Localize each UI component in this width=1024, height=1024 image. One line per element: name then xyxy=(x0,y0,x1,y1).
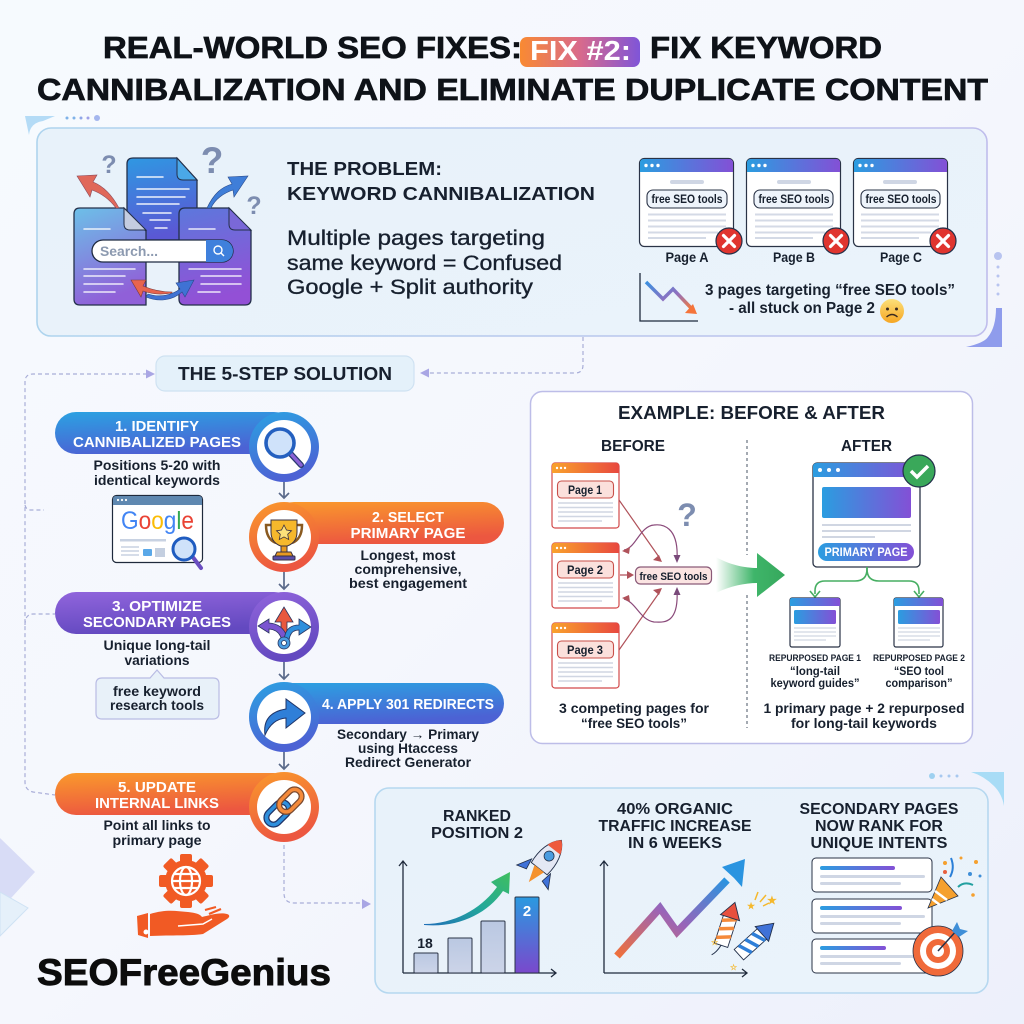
result 2: 40 percent traffic increase: 40% ORGANIC xyxy=(617,801,733,818)
panel: example before and after xyxy=(530,392,972,744)
callout: free keyword research tools: free keyword xyxy=(113,684,201,699)
step 2: select primary page: 2. SELECT xyxy=(372,509,444,526)
browser: page A: Page A xyxy=(666,250,709,265)
arrow: step 3 to 4 xyxy=(279,662,289,679)
step 3: optimize secondary pages: variations xyxy=(124,653,190,668)
icon: party popper xyxy=(928,856,982,908)
browser: page 2 xyxy=(552,543,619,608)
text: stuck on page 2 xyxy=(705,282,955,317)
connector: primary to repurposed pages xyxy=(810,567,924,597)
icon: sad face xyxy=(880,299,904,323)
heading: the problem: KEYWORD CANNIBALIZATION xyxy=(287,184,595,204)
step 1: identify cannibalized pages: identical keywords xyxy=(94,473,220,488)
step 2: select primary page xyxy=(249,502,504,591)
browser: page 2: Page 2 xyxy=(567,565,603,577)
keyword node: free SEO tools: free SEO tools xyxy=(640,571,708,583)
heading: the problem xyxy=(287,159,595,204)
result 3: secondary pages rank: NOW RANK FOR xyxy=(815,818,943,835)
result 3: secondary pages rank xyxy=(800,801,982,976)
result 1: ranked position 2: RANKED xyxy=(443,808,511,825)
logo: SEOFreeGenius xyxy=(37,854,331,993)
caption: before summary: “free SEO tools” xyxy=(581,715,687,731)
text: problem description: same keyword = Confused xyxy=(287,252,562,275)
chart: falling ranking xyxy=(640,273,698,321)
caption: repurposed page 1: “long-tail xyxy=(790,666,840,678)
arrow: before to after xyxy=(716,553,785,597)
fix number badge: FIX #2: xyxy=(530,35,631,66)
title: CANNIBALIZATION AND ELIMINATE DUPLICATE CONTENT xyxy=(37,72,988,107)
keyword node: free SEO tools xyxy=(636,567,712,584)
step 5: update internal links xyxy=(55,772,319,848)
text: stuck on page 2: 3 pages targeting “free SEO tools” xyxy=(705,282,955,299)
caption: repurposed page 1: keyword guides” xyxy=(770,678,860,690)
callout: free keyword research tools: research tools xyxy=(110,698,204,713)
step 3: optimize secondary pages xyxy=(55,592,319,668)
primary page label: PRIMARY PAGE xyxy=(824,545,908,559)
step 1: identify cannibalized pages: CANNIBALIZED PAGES xyxy=(73,434,241,451)
icon: firework rockets: ★ xyxy=(747,901,756,911)
arrows: pages competing for keyword xyxy=(619,500,680,650)
result 3: secondary pages rank: UNIQUE INTENTS xyxy=(810,835,948,852)
caption: after summary: for long-tail keywords xyxy=(791,715,937,731)
caption: after summary xyxy=(764,700,964,731)
step 4: apply 301 redirects: Secondary → Primary xyxy=(337,727,479,742)
text: problem description: Google + Split authority xyxy=(287,276,534,299)
text: problem description: Multiple pages targeting xyxy=(287,227,545,250)
bar chart: ranking climb: 18 xyxy=(417,935,433,951)
icon: green check xyxy=(903,455,935,487)
arrow: step 4 to 5 xyxy=(279,752,289,769)
heading: the problem: THE PROBLEM: xyxy=(287,159,442,179)
step 5: update internal links: 5. UPDATE xyxy=(118,779,196,796)
icon: firework rockets: ☆ xyxy=(730,963,738,972)
search result cards xyxy=(812,858,932,973)
icon: rocket xyxy=(513,828,577,894)
step 2: select primary page: comprehensive, xyxy=(354,562,462,577)
arrow: step 1 to 2 xyxy=(279,482,289,498)
browser: primary page xyxy=(813,455,935,567)
caption: repurposed page 1 xyxy=(769,653,862,690)
step 4: apply 301 redirects: 4. APPLY 301 REDIRECTS xyxy=(322,696,494,713)
icon: chain link xyxy=(263,786,305,828)
title: FIX KEYWORD xyxy=(650,30,882,65)
icon: google search window xyxy=(112,496,202,568)
text: stuck on page 2: - all stuck on Page 2 xyxy=(729,300,875,317)
title: REAL-WORLD SEO FIXES: xyxy=(103,30,522,65)
browser: page B xyxy=(746,158,849,265)
arrowheads on connectors xyxy=(146,368,429,909)
search bar: Search... xyxy=(100,243,158,259)
title xyxy=(37,30,988,107)
browser: repurposed page 2 xyxy=(894,598,943,647)
step 5: update internal links: primary page xyxy=(112,833,202,848)
browser: page 3: Page 3 xyxy=(567,645,603,657)
text: problem description xyxy=(287,227,562,299)
result 3: secondary pages rank: SECONDARY PAGES xyxy=(800,801,958,818)
line chart: traffic growth xyxy=(600,859,747,977)
question marks xyxy=(101,140,262,220)
icon: target with dart xyxy=(913,922,968,976)
icon: trophy xyxy=(266,520,302,560)
caption: after summary: 1 primary page + 2 repurposed xyxy=(764,700,964,716)
step 4: apply 301 redirects xyxy=(249,682,504,770)
heading: example: EXAMPLE: BEFORE & AFTER xyxy=(618,403,885,423)
question marks: ? xyxy=(246,192,262,220)
browser: page A: free SEO tools xyxy=(652,194,722,206)
caption: repurposed page 2: comparison” xyxy=(886,678,952,690)
browser: page C: Page C xyxy=(880,250,922,265)
browser: page B: Page B xyxy=(773,250,815,265)
heading: the 5-step solution xyxy=(156,356,414,391)
icon: google search window: Google xyxy=(121,507,194,535)
question marks: ? xyxy=(101,151,117,179)
step 1: identify cannibalized pages: Positions 5-20 with xyxy=(94,458,220,473)
decoration: right edge dots and corner xyxy=(966,252,1002,347)
step 5: update internal links: INTERNAL LINKS xyxy=(95,795,219,812)
browser: page 1: Page 1 xyxy=(568,485,603,497)
browser: page A xyxy=(640,158,742,265)
callout: free keyword research tools xyxy=(96,670,219,719)
icon: competing documents with search bar xyxy=(74,140,262,305)
arrow: step 2 to 3 xyxy=(279,572,289,589)
browser: page C: free SEO tools xyxy=(866,194,936,206)
bar chart: ranking climb xyxy=(399,861,556,977)
heading: the 5-step solution: THE 5-STEP SOLUTION xyxy=(178,364,392,384)
step 2: select primary page: Longest, most xyxy=(360,548,456,563)
step 1: identify cannibalized pages xyxy=(55,412,319,488)
step 2: select primary page: PRIMARY PAGE xyxy=(350,525,466,542)
icon: branching arrows xyxy=(258,607,311,649)
caption: before summary: 3 competing pages for xyxy=(559,700,710,716)
browser: page 1 xyxy=(552,463,619,528)
result 1: ranked position 2: POSITION 2 xyxy=(431,825,523,842)
icon: gear globe and hand xyxy=(137,854,229,938)
decoration: results panel corner xyxy=(929,772,1004,806)
bar chart: ranking climb: 2 xyxy=(523,903,531,920)
step 4: apply 301 redirects: using Htaccess xyxy=(358,741,458,756)
decoration: top-left corner xyxy=(25,115,100,135)
caption: repurposed page 2 xyxy=(873,653,965,690)
result 2: 40 percent traffic increase: IN 6 WEEKS xyxy=(628,835,722,852)
decoration: bottom-left diamonds xyxy=(0,838,35,936)
icon: magnifier xyxy=(266,429,301,465)
step 5: update internal links: Point all links to xyxy=(104,818,210,833)
icon: redirect arrow xyxy=(265,699,305,735)
browser: page C xyxy=(854,158,956,265)
caption: repurposed page 2: “SEO tool xyxy=(894,666,944,678)
result 1: ranked position 2 xyxy=(399,808,577,977)
step 1: identify cannibalized pages: 1. IDENTIFY xyxy=(115,418,199,435)
panel: results xyxy=(375,788,988,993)
logo: SEOFreeGenius: SEOFreeGenius xyxy=(37,952,331,993)
step 3: optimize secondary pages: SECONDARY PAGES xyxy=(83,614,231,631)
step 3: optimize secondary pages: Unique long-tail xyxy=(104,638,210,653)
icon: firework rockets: ★ xyxy=(767,895,777,907)
result 2: 40 percent traffic increase: TRAFFIC INCREASE xyxy=(598,818,752,835)
caption: before summary xyxy=(559,700,710,731)
question marks: ? xyxy=(201,140,223,181)
step 4: apply 301 redirects: Redirect Generator xyxy=(345,755,472,770)
browser: page B: free SEO tools xyxy=(758,194,830,206)
panel: the problem xyxy=(37,128,987,336)
icon: question mark: ? xyxy=(677,497,697,533)
browser: repurposed page 1 xyxy=(790,598,840,647)
result 2: 40 percent traffic increase xyxy=(598,801,780,977)
browser: page 3 xyxy=(552,623,619,688)
search bar xyxy=(92,240,233,262)
heading: before: BEFORE xyxy=(601,438,665,455)
flow connectors xyxy=(25,337,583,903)
icon: firework rockets xyxy=(708,892,780,972)
heading: after: AFTER xyxy=(841,438,892,455)
icon: firework rockets: ☆ xyxy=(711,938,719,947)
caption: repurposed page 1: REPURPOSED PAGE 1 xyxy=(769,653,862,664)
step 2: select primary page: best engagement xyxy=(349,576,468,591)
step 3: optimize secondary pages: 3. OPTIMIZE xyxy=(112,598,202,615)
caption: repurposed page 2: REPURPOSED PAGE 2 xyxy=(873,653,965,664)
